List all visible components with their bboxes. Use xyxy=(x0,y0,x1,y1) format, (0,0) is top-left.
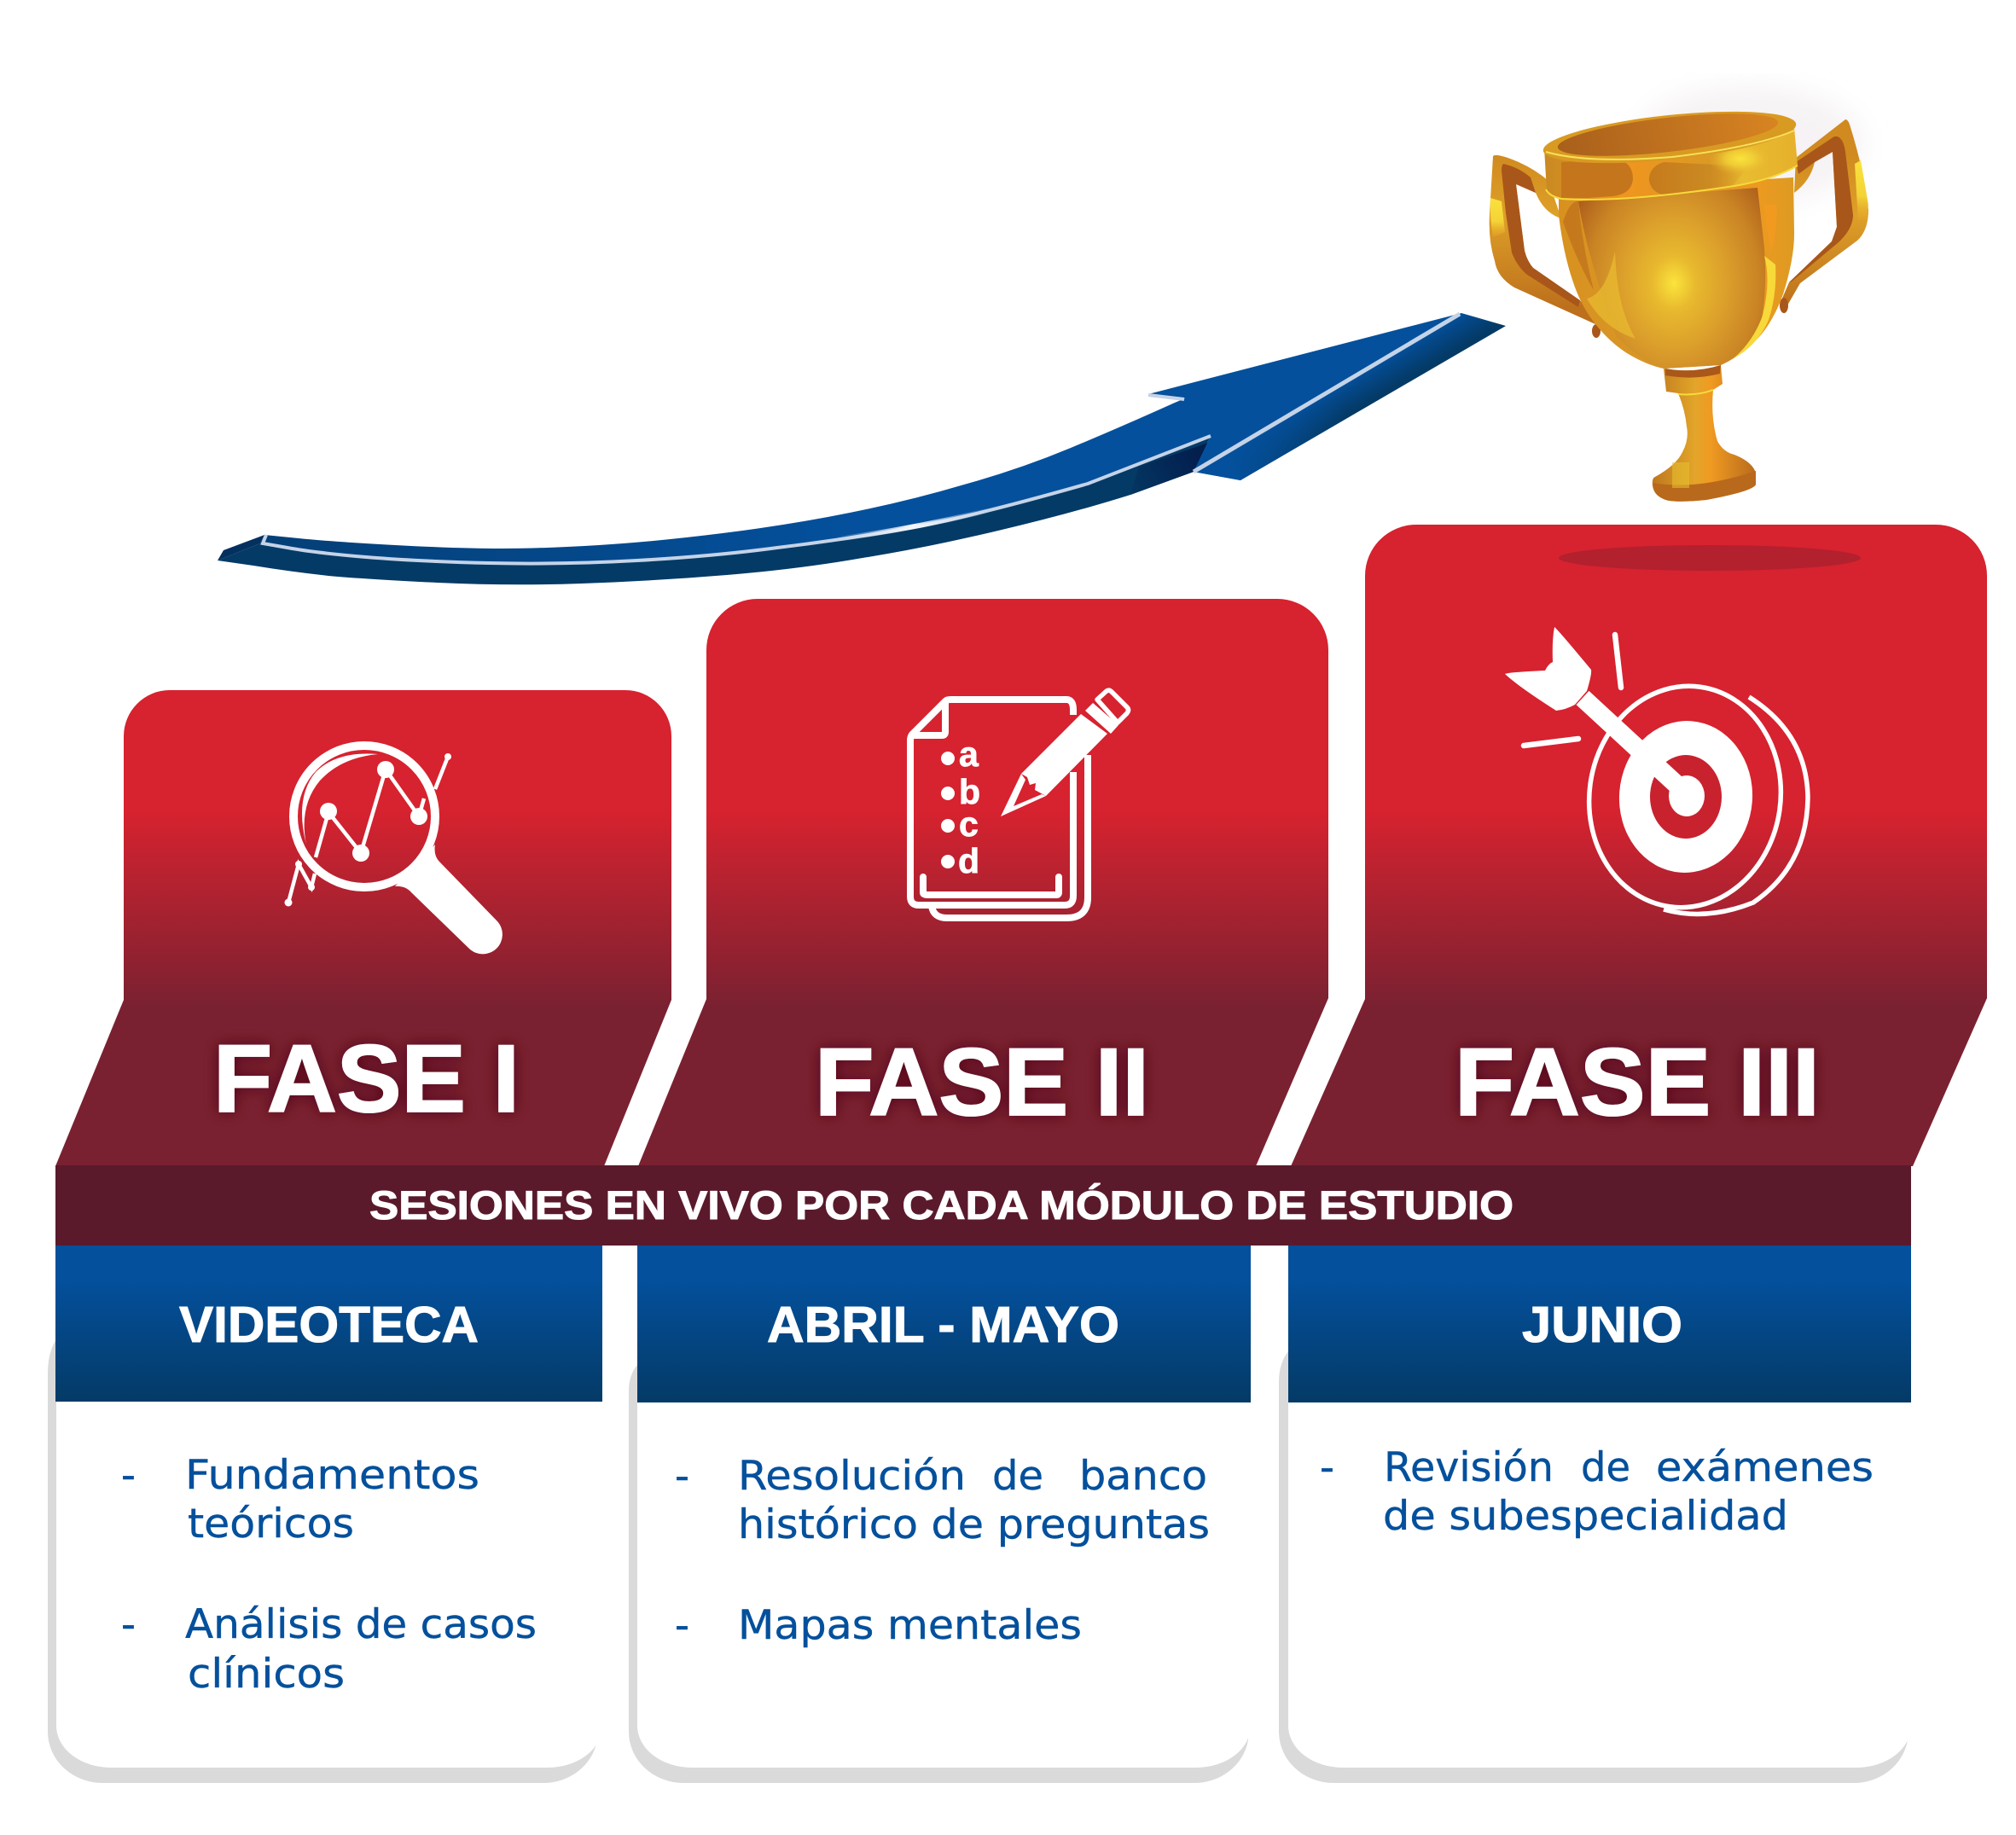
panel: card 2 body xyxy=(637,1399,1251,1768)
trophy shadow on panel xyxy=(1559,545,1861,571)
icon: exam sheet and pencil: d xyxy=(958,841,979,880)
trophy left handle xyxy=(1490,155,1595,324)
bar: videoteca: VIDEOTECA xyxy=(179,1297,479,1353)
icon: exam sheet and pencil: c xyxy=(959,804,979,844)
bar: junio: JUNIO xyxy=(1522,1297,1682,1353)
trophy stem and base xyxy=(1653,365,1756,502)
bar: junio xyxy=(1288,1246,1911,1402)
bar: abril - mayo: ABRIL - MAYO xyxy=(767,1297,1119,1353)
text block: videoteca items: - xyxy=(121,1452,136,1499)
icon: exam sheet and pencil: a xyxy=(959,735,979,774)
trophy cup body xyxy=(1559,177,1794,369)
text block: abril-mayo items: histórico de preguntas xyxy=(738,1501,1210,1548)
text block: junio items: de subespecialidad xyxy=(1383,1493,1788,1540)
text block: junio items: Revisión xyxy=(1384,1444,1554,1491)
text block: junio items: - xyxy=(1320,1444,1334,1491)
panel: fase 3 red header xyxy=(1291,525,1987,1166)
heading: fase 3: FASE III xyxy=(1455,1029,1820,1135)
text block: abril-mayo items xyxy=(675,1453,1210,1649)
band: live sessions xyxy=(55,1165,1911,1246)
trophy rim xyxy=(1541,102,1798,200)
text block: junio items: exámenes xyxy=(1656,1444,1874,1491)
card shadows xyxy=(48,1339,1908,1783)
text block: junio items: de xyxy=(1581,1444,1630,1491)
text block: abril-mayo items: Resolución xyxy=(738,1453,966,1500)
band: live sessions: SESIONES EN VIVO POR CADA MÓDULO DE ESTUDIO xyxy=(369,1182,1513,1228)
heading: fase 2: FASE II xyxy=(815,1029,1149,1135)
icon: trophy xyxy=(1490,85,1868,502)
bar: videoteca xyxy=(55,1246,602,1402)
text block: videoteca items xyxy=(121,1452,537,1698)
text block: videoteca items: Fundamentos xyxy=(185,1452,479,1499)
icon: exam sheet and pencil xyxy=(910,690,1128,918)
trophy right handle xyxy=(1592,119,1868,338)
arrow xyxy=(218,313,1506,584)
text block: abril-mayo items: banco xyxy=(1079,1453,1207,1500)
text block: junio items xyxy=(1320,1444,1874,1540)
text block: abril-mayo items: - xyxy=(675,1453,689,1500)
icon: exam sheet and pencil: b xyxy=(959,772,980,811)
heading: fase 1: FASE I xyxy=(213,1025,520,1132)
text block: videoteca items: - xyxy=(121,1601,136,1648)
text block: videoteca items: clínicos xyxy=(188,1651,345,1698)
bar: abril - mayo xyxy=(637,1246,1251,1402)
panel: card 3 body xyxy=(1288,1399,1911,1768)
text block: abril-mayo items: Mapas mentales xyxy=(738,1602,1082,1649)
text block: abril-mayo items: de xyxy=(992,1453,1043,1500)
panel: card 1 body xyxy=(56,1399,602,1768)
panel: fase 1 red header xyxy=(55,690,671,1166)
panel: fase 2 red header xyxy=(638,599,1328,1166)
icon: magnifier with chart xyxy=(285,746,503,954)
text block: videoteca items: Análisis de casos xyxy=(185,1601,537,1648)
text block: videoteca items: teóricos xyxy=(188,1501,354,1548)
icon: target with dart xyxy=(1505,627,1808,920)
text block: abril-mayo items: - xyxy=(675,1602,689,1649)
